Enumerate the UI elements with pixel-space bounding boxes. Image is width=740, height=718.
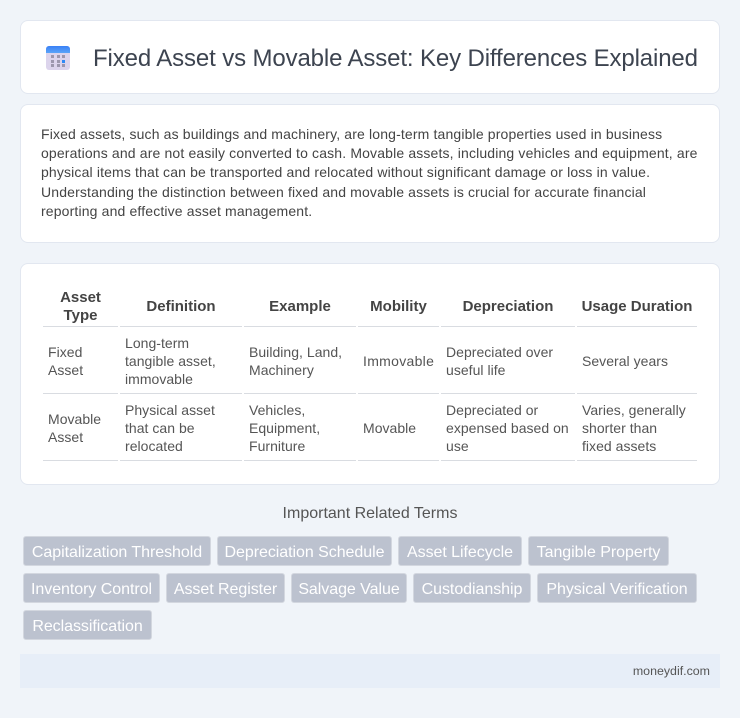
tags: related terms: Capitalization Threshold (32, 544, 202, 561)
table row: movable asset: Vehicles, (249, 402, 305, 418)
table row: fixed asset: Building, Land, (249, 344, 342, 360)
table row: movable asset: Movable (363, 420, 416, 436)
table row: movable asset: Depreciated or (446, 402, 538, 418)
tags: related terms: Salvage Value (298, 581, 400, 598)
table row: fixed asset: Depreciated over (446, 344, 553, 360)
heading: important related terms: Important Related Terms (283, 505, 457, 522)
text block: introduction: physical items that can be transported and relocated without significant damage or loss in value. (41, 164, 650, 180)
footer bar (20, 654, 720, 688)
table header row: Example (269, 298, 331, 315)
text block: introduction (41, 126, 698, 219)
tags: related terms: Reclassification (32, 618, 143, 635)
table row: fixed asset: Long-term (125, 335, 189, 351)
table header row: Depreciation (463, 298, 553, 315)
table row: fixed asset: Asset (48, 362, 83, 378)
table row: fixed asset: immovable (125, 371, 193, 387)
table row: movable asset: that can be (125, 420, 195, 436)
table row: fixed asset: Machinery (249, 362, 314, 378)
table row: movable asset: Varies, generally (582, 402, 686, 418)
table row: movable asset: relocated (125, 438, 183, 454)
icon: calendar grid (46, 46, 70, 70)
table row: movable asset: fixed assets (582, 438, 656, 454)
table row: movable asset: expensed based on (446, 420, 569, 436)
table row: fixed asset: tangible asset, (125, 353, 216, 369)
table row: fixed asset: Fixed (48, 344, 82, 360)
table row: movable asset: shorter than (582, 420, 657, 436)
tags: related terms: Physical Verification (546, 581, 688, 598)
table row: fixed asset: Several years (582, 353, 668, 369)
panel: comparison table (20, 263, 720, 485)
text block: introduction: reporting and effective asset management. (41, 203, 312, 219)
table header row: Usage Duration (582, 298, 692, 315)
footer source text: moneydif.com (633, 664, 710, 678)
table row: fixed asset: useful life (446, 362, 505, 378)
table row: movable asset: Movable (48, 411, 101, 427)
table row: fixed asset: Immovable (363, 353, 434, 369)
table row: movable asset: Asset (48, 429, 83, 445)
panel: intro text (20, 104, 720, 243)
tags: related terms: Depreciation Schedule (225, 544, 384, 561)
tags: related terms (23, 536, 697, 640)
table row: movable asset: Equipment, (249, 420, 320, 436)
tags: related terms: Tangible Property (537, 544, 660, 561)
tags: related terms: Asset Lifecycle (407, 544, 513, 561)
table row: movable asset: use (446, 438, 469, 454)
tags: related terms: Inventory Control (31, 581, 152, 598)
table header row: Asset (60, 289, 101, 306)
text block: introduction: Fixed assets, such as buildings and machinery, are long-term tangible properties used in business (41, 126, 662, 142)
text block: introduction: Understanding the distinction between fixed and movable assets is crucial for accurate financial (41, 184, 646, 200)
tags: related terms: Custodianship (422, 581, 522, 598)
table row: movable asset: Physical asset (125, 402, 215, 418)
text block: introduction: operations and are not easily converted to cash. Movable assets, including vehicles and equipment, are (41, 145, 698, 161)
table row: movable asset (48, 402, 686, 454)
title: Fixed Asset vs Movable Asset: Key Differences Explained (93, 45, 698, 72)
panel: title header (20, 20, 720, 94)
table header row: Definition (146, 298, 216, 315)
tags: related terms: Asset Register (174, 581, 277, 598)
table row: fixed asset (48, 335, 668, 387)
table row: movable asset: Furniture (249, 438, 305, 454)
table header row: Type (64, 307, 97, 324)
table header row: Mobility (370, 298, 427, 315)
table header row (60, 289, 692, 324)
